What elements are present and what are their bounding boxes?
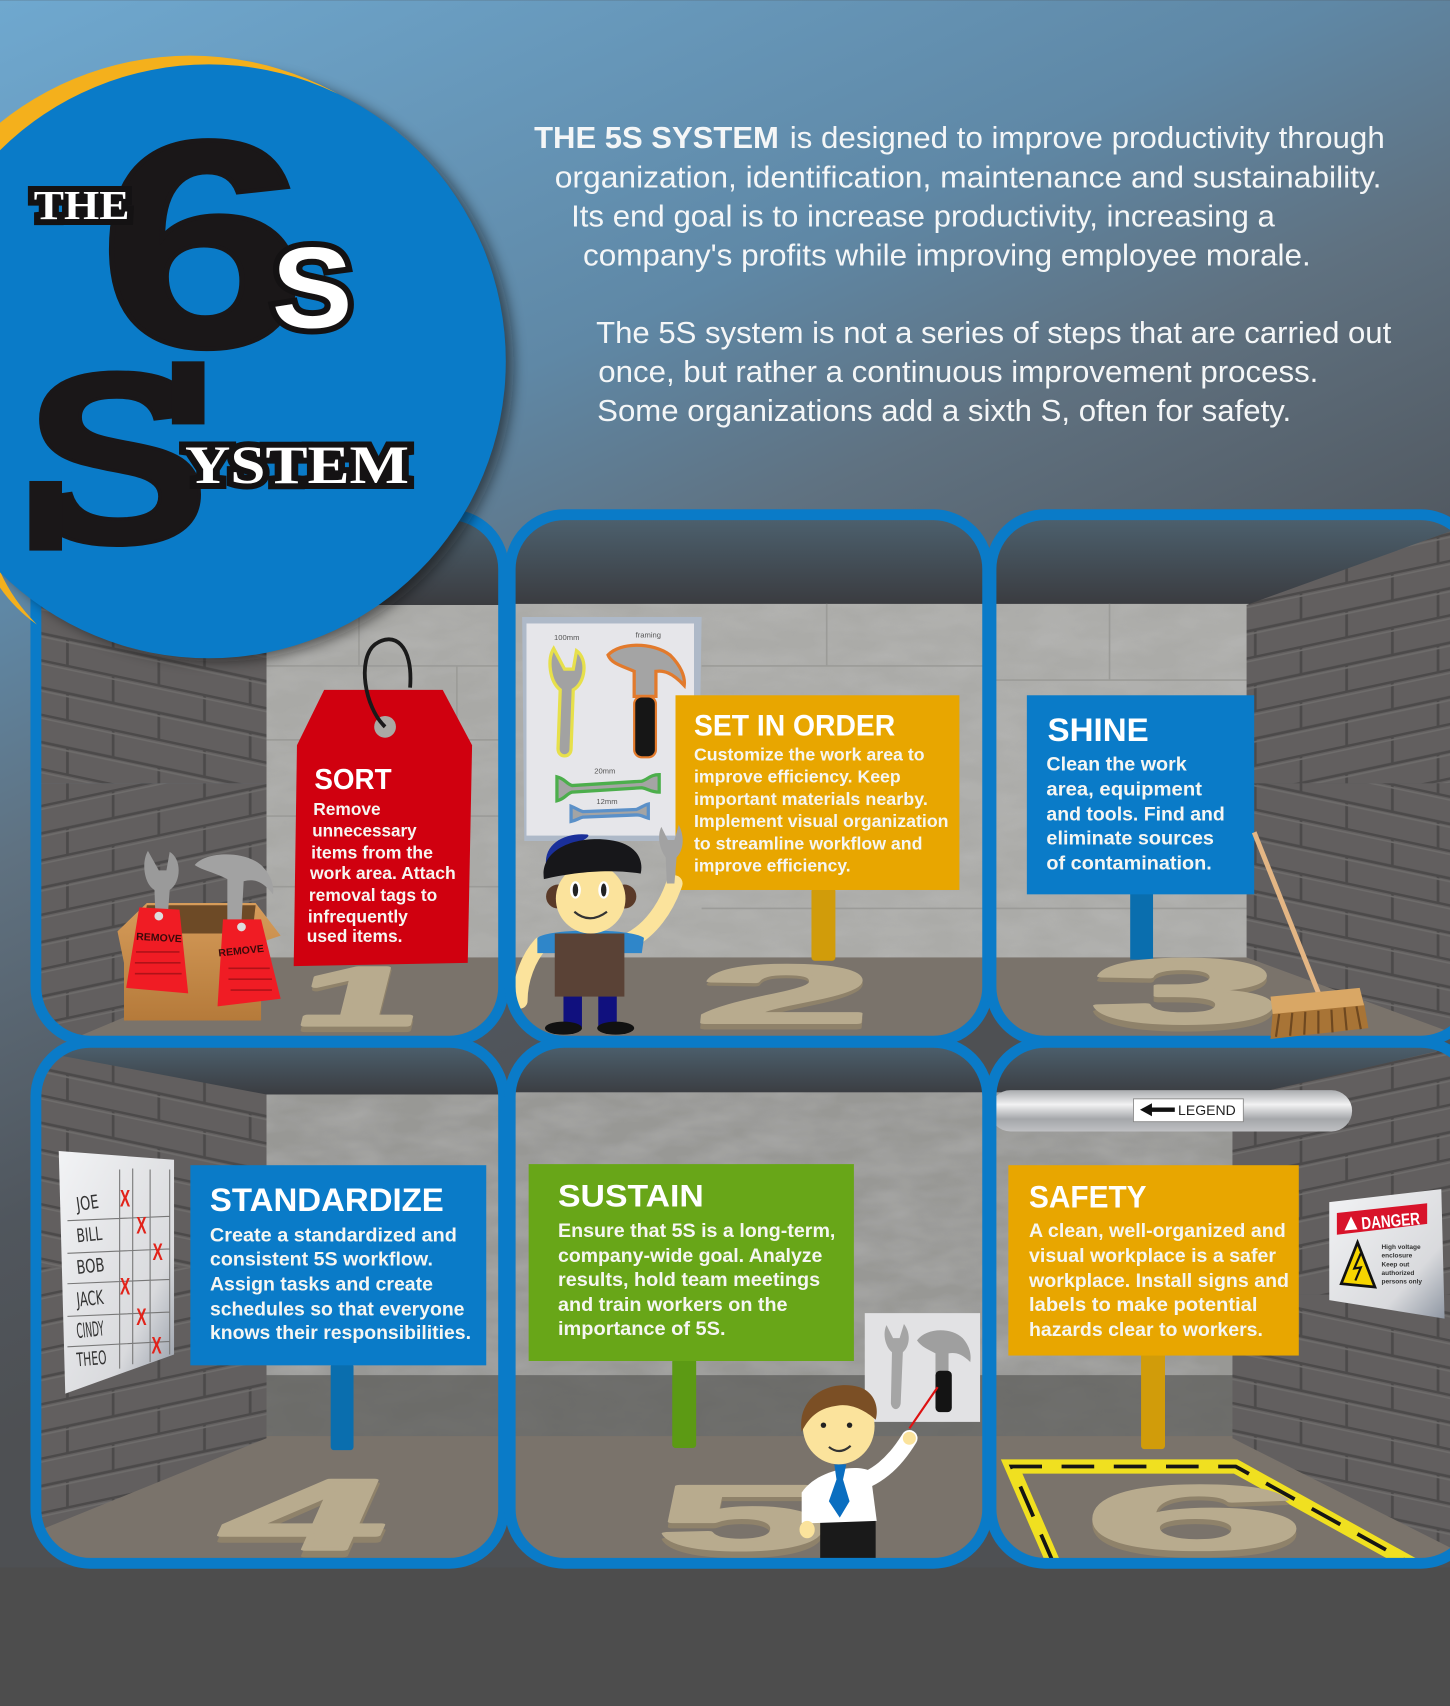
danger sign: High voltage	[1381, 1244, 1421, 1251]
schedule board: JACK	[75, 1286, 105, 1312]
floor tape	[1012, 1467, 1416, 1567]
intro text: The 5S system is not a series of steps that are carried out	[596, 316, 1392, 350]
sign: shine	[1027, 695, 1254, 960]
sign: safety	[1008, 1165, 1299, 1449]
sign: sustain: and train workers on the	[558, 1294, 788, 1316]
sign: set in order: improve efficiency.	[694, 855, 851, 875]
big S: S	[24, 321, 210, 595]
tag: sort: used items.	[307, 926, 402, 946]
sign: standardize: schedules so that everyone	[210, 1298, 465, 1320]
sign: sustain	[529, 1164, 854, 1448]
sign: safety: SAFETY	[1029, 1179, 1147, 1215]
danger sign: persons only	[1381, 1279, 1422, 1286]
tool poster: framing	[636, 631, 661, 640]
sign: safety: labels to make potential	[1029, 1294, 1257, 1316]
sign: safety: workplace. Install signs and	[1028, 1270, 1289, 1292]
number 5: 5	[657, 1466, 826, 1569]
schedule board: X	[136, 1305, 147, 1331]
schedule board: X	[152, 1333, 162, 1359]
tool poster: 12mm	[596, 797, 618, 806]
sign: shine: eliminate sources	[1046, 827, 1214, 849]
legend label	[1133, 1099, 1243, 1122]
sign: shine: area, equipment	[1046, 778, 1202, 800]
sign: standardize: Create a standardized and	[210, 1224, 457, 1246]
sign: standardize: knows their responsibilities.	[210, 1322, 471, 1344]
intro text: is designed to improve productivity through	[790, 121, 1385, 155]
panel: 4 standardize	[36, 1042, 504, 1578]
icon: box with tagged tools: REMOVE	[136, 932, 182, 945]
tool poster	[865, 1313, 980, 1422]
schedule board: X	[120, 1274, 131, 1301]
tag: sort: infrequently	[308, 907, 408, 927]
sign: shine: Clean the work	[1046, 753, 1187, 775]
bottom band	[0, 1568, 1450, 1706]
tag: sort: removal tags to	[309, 885, 437, 905]
number 2: 2	[692, 948, 877, 1040]
icon: broom	[1254, 832, 1368, 1039]
tag: sort: SORT	[314, 763, 392, 795]
schedule board: BILL	[75, 1222, 103, 1247]
number 1: 1	[287, 952, 432, 1049]
number 3: 3	[1090, 943, 1281, 1050]
title disc	[0, 56, 513, 663]
legend label: LEGEND	[1178, 1102, 1236, 1118]
schedule board: JOE	[74, 1191, 100, 1216]
tag: sort	[294, 639, 472, 966]
number 2: 2	[692, 950, 878, 1047]
number 5: 5	[657, 1469, 826, 1576]
schedule board: X	[136, 1213, 147, 1240]
tag: sort: items from the	[311, 842, 433, 862]
intro text: THE 5S SYSTEM	[534, 121, 779, 155]
tool poster: 100mm	[554, 633, 579, 642]
number 1: 1	[287, 950, 431, 1043]
panel: 1 sort	[36, 515, 504, 1049]
sign: sustain: SUSTAIN	[558, 1178, 704, 1214]
sign: sustain: results, hold team meetings	[558, 1269, 820, 1291]
sign: shine: of contamination.	[1046, 852, 1212, 874]
sign: sustain: importance of 5S.	[558, 1318, 726, 1340]
intro text: once, but rather a continuous improvement process.	[598, 355, 1318, 389]
intro text: Some organizations add a sixth S, often for safety.	[597, 394, 1291, 428]
number 3: 3	[1090, 940, 1281, 1042]
small s: S	[272, 225, 352, 353]
number 4: 4	[201, 1459, 411, 1571]
sign: shine: SHINE	[1048, 711, 1149, 748]
sign: standardize: consistent 5S workflow.	[210, 1248, 433, 1270]
sign: set in order: improve efficiency. Keep	[694, 766, 901, 786]
intro text: company's profits while improving employee morale.	[583, 239, 1311, 273]
intro text: organization, identification, maintenance and sustainability.	[555, 160, 1381, 194]
icon: box with tagged tools	[117, 851, 281, 1021]
sign: standardize	[190, 1165, 486, 1450]
character: manager with pointer	[800, 1385, 938, 1561]
tool poster	[522, 617, 702, 841]
tool poster: 20mm	[594, 767, 615, 776]
tag: sort: work area. Attach	[309, 863, 456, 883]
sign: set in order	[676, 695, 959, 961]
sign: set in order: Customize the work area to	[694, 745, 925, 765]
word: YSTEM: YSTEM	[185, 435, 409, 495]
intro text	[534, 121, 1392, 428]
danger sign	[1329, 1189, 1445, 1319]
icon: box with tagged tools: REMOVE	[218, 944, 265, 960]
sign: set in order: to streamline workflow and	[694, 834, 922, 854]
schedule board: X	[153, 1240, 163, 1266]
sign: standardize: Assign tasks and create	[210, 1273, 433, 1295]
schedule board: THEO	[75, 1347, 107, 1371]
pipe	[990, 1090, 1352, 1131]
sign: sustain: company-wide goal. Analyze	[558, 1245, 822, 1267]
number 6: 6	[1082, 1469, 1306, 1576]
big 6: 6	[98, 79, 308, 409]
danger sign: authorized	[1381, 1270, 1414, 1277]
sign: safety: hazards clear to workers.	[1029, 1319, 1263, 1341]
schedule board: BOB	[75, 1254, 106, 1279]
danger sign: enclosure	[1381, 1253, 1413, 1260]
sign: shine: and tools. Find and	[1046, 803, 1225, 825]
danger sign: Keep out	[1381, 1261, 1410, 1268]
sign: standardize: STANDARDIZE	[210, 1181, 444, 1218]
panel: 2 set in order	[510, 515, 988, 1047]
tag: sort: Remove	[313, 799, 381, 819]
panel: 5 sustain	[510, 1042, 988, 1576]
panel: 3 shine	[991, 515, 1450, 1050]
tag: sort: unnecessary	[312, 821, 417, 841]
number 6: 6	[1082, 1467, 1306, 1569]
blue room frames	[36, 515, 1450, 1563]
sign: set in order: SET IN ORDER	[694, 710, 895, 743]
danger sign: DANGER	[1360, 1208, 1421, 1233]
number 4: 4	[201, 1462, 413, 1578]
sign: safety: A clean, well-organized and	[1029, 1220, 1286, 1242]
word: THE: THE	[34, 182, 129, 228]
intro text: Its end goal is to increase productivity, increasing a	[571, 199, 1275, 233]
panel: 6 safety	[990, 1042, 1450, 1576]
sign: sustain: Ensure that 5S is a long-term,	[558, 1220, 835, 1242]
schedule board: CINDY	[75, 1316, 105, 1343]
sign: set in order: important materials nearby.	[694, 789, 928, 809]
character: worker with wrench	[520, 825, 683, 1035]
sign: set in order: Implement visual organization	[694, 811, 949, 831]
schedule board: X	[120, 1186, 131, 1212]
sign: safety: visual workplace is a safer	[1029, 1245, 1276, 1267]
schedule board	[59, 1151, 174, 1394]
